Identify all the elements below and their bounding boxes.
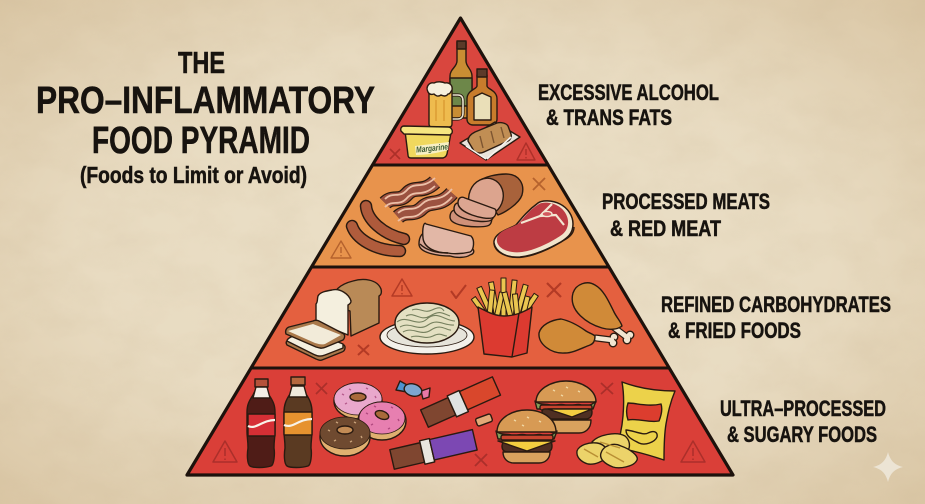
icon: x mark: [475, 454, 487, 466]
pyramid outline: [187, 18, 733, 475]
icon: chocolate piece: [475, 414, 493, 426]
tier label: excessive alcohol: EXCESSIVE ALCOHOL: [538, 80, 719, 105]
icon: warning triangle: [331, 241, 351, 258]
icon: sausages: [352, 206, 404, 251]
icon: sliced luncheon meat: [419, 223, 474, 257]
title block: [36, 45, 375, 188]
title line: THE: THE: [178, 45, 225, 80]
icon: plate of pasta: [380, 303, 474, 354]
tier 3 band: [251, 267, 670, 368]
icon: fried chicken legs: [539, 283, 634, 353]
tier label: ultra-processed: & SUGARY FOODS: [727, 422, 877, 447]
tier label: ultra-processed: [720, 396, 886, 447]
icon: x mark: [316, 383, 327, 394]
panel: tier 3 refined carbohydrates and fried foods: [286, 278, 634, 360]
icon: potato chips: [577, 434, 637, 468]
tier label: processed meats: PROCESSED MEATS: [602, 189, 770, 214]
icon: x mark: [390, 149, 400, 159]
icon: fries: [471, 278, 538, 357]
icon: cola bottle: [247, 379, 275, 468]
title line: FOOD PYRAMID: FOOD PYRAMID: [92, 120, 310, 162]
panel: tier 4 ultra-processed and sugary foods: [213, 376, 705, 471]
icon: candy: [396, 381, 430, 399]
icon: orange soda bottle: [284, 377, 312, 468]
tier label: processed meats: [602, 189, 770, 241]
icon: x mark: [601, 383, 613, 394]
icon: packaged pastry: [460, 122, 520, 160]
icon: chocolate donut: [320, 417, 370, 456]
icon: warning triangle: [213, 441, 237, 462]
tier 1 band: [372, 18, 549, 165]
icon: ham roll with slices: [450, 173, 523, 227]
icon: check mark: [451, 285, 466, 298]
tier label: refined carbohydrates: [661, 292, 891, 343]
icon: x mark: [547, 283, 561, 297]
icon: t-bone steak: [494, 201, 574, 257]
tier label: refined carbohydrates: & FRIED FOODS: [668, 318, 801, 343]
icon: whiskey flask: [467, 69, 497, 125]
icon: bacon strips: [385, 178, 452, 221]
tier label: processed meats: & RED MEAT: [610, 216, 721, 241]
icon: back burger: [535, 381, 596, 433]
pyramid: [187, 18, 733, 475]
icon: warning triangle: [681, 441, 705, 462]
icon: front burger: [496, 410, 557, 463]
icon: beer mug: [427, 82, 463, 127]
icon: purple chocolate bar: [389, 429, 478, 471]
icon: bread loaf: [316, 280, 381, 336]
title line: PRO-INFLAMMATORY: PRO–INFLAMMATORY: [36, 80, 375, 122]
icon: x mark: [358, 345, 369, 355]
subtitle: (Foods to Limit or Avoid): [80, 162, 307, 188]
icon: warning triangle: [392, 279, 412, 296]
tier label: excessive alcohol: & TRANS FATS: [546, 105, 672, 130]
icon: bag of chips: [616, 382, 675, 460]
panel: tier 2 processed and red meats: [331, 173, 574, 258]
panel: tier 1 alcohol and trans fats: [390, 41, 535, 160]
icon: sparkle watermark: [873, 452, 903, 482]
icon: liquor bottle: [450, 41, 472, 118]
tier 2 band: [311, 165, 610, 267]
icon: bread slices: [286, 320, 345, 360]
tier 4 band: [187, 368, 733, 475]
margarine label text: Margarine: [416, 141, 449, 155]
icon: margarine tub: [401, 126, 452, 158]
icon: warning triangle: [517, 143, 535, 160]
icon: pink frosted donut: [358, 402, 406, 440]
icon: pink donut: [334, 383, 382, 419]
icon: chocolate bar with red wrapper: [420, 376, 501, 429]
icon: x mark: [533, 178, 545, 190]
tier label: excessive alcohol: [538, 80, 719, 130]
